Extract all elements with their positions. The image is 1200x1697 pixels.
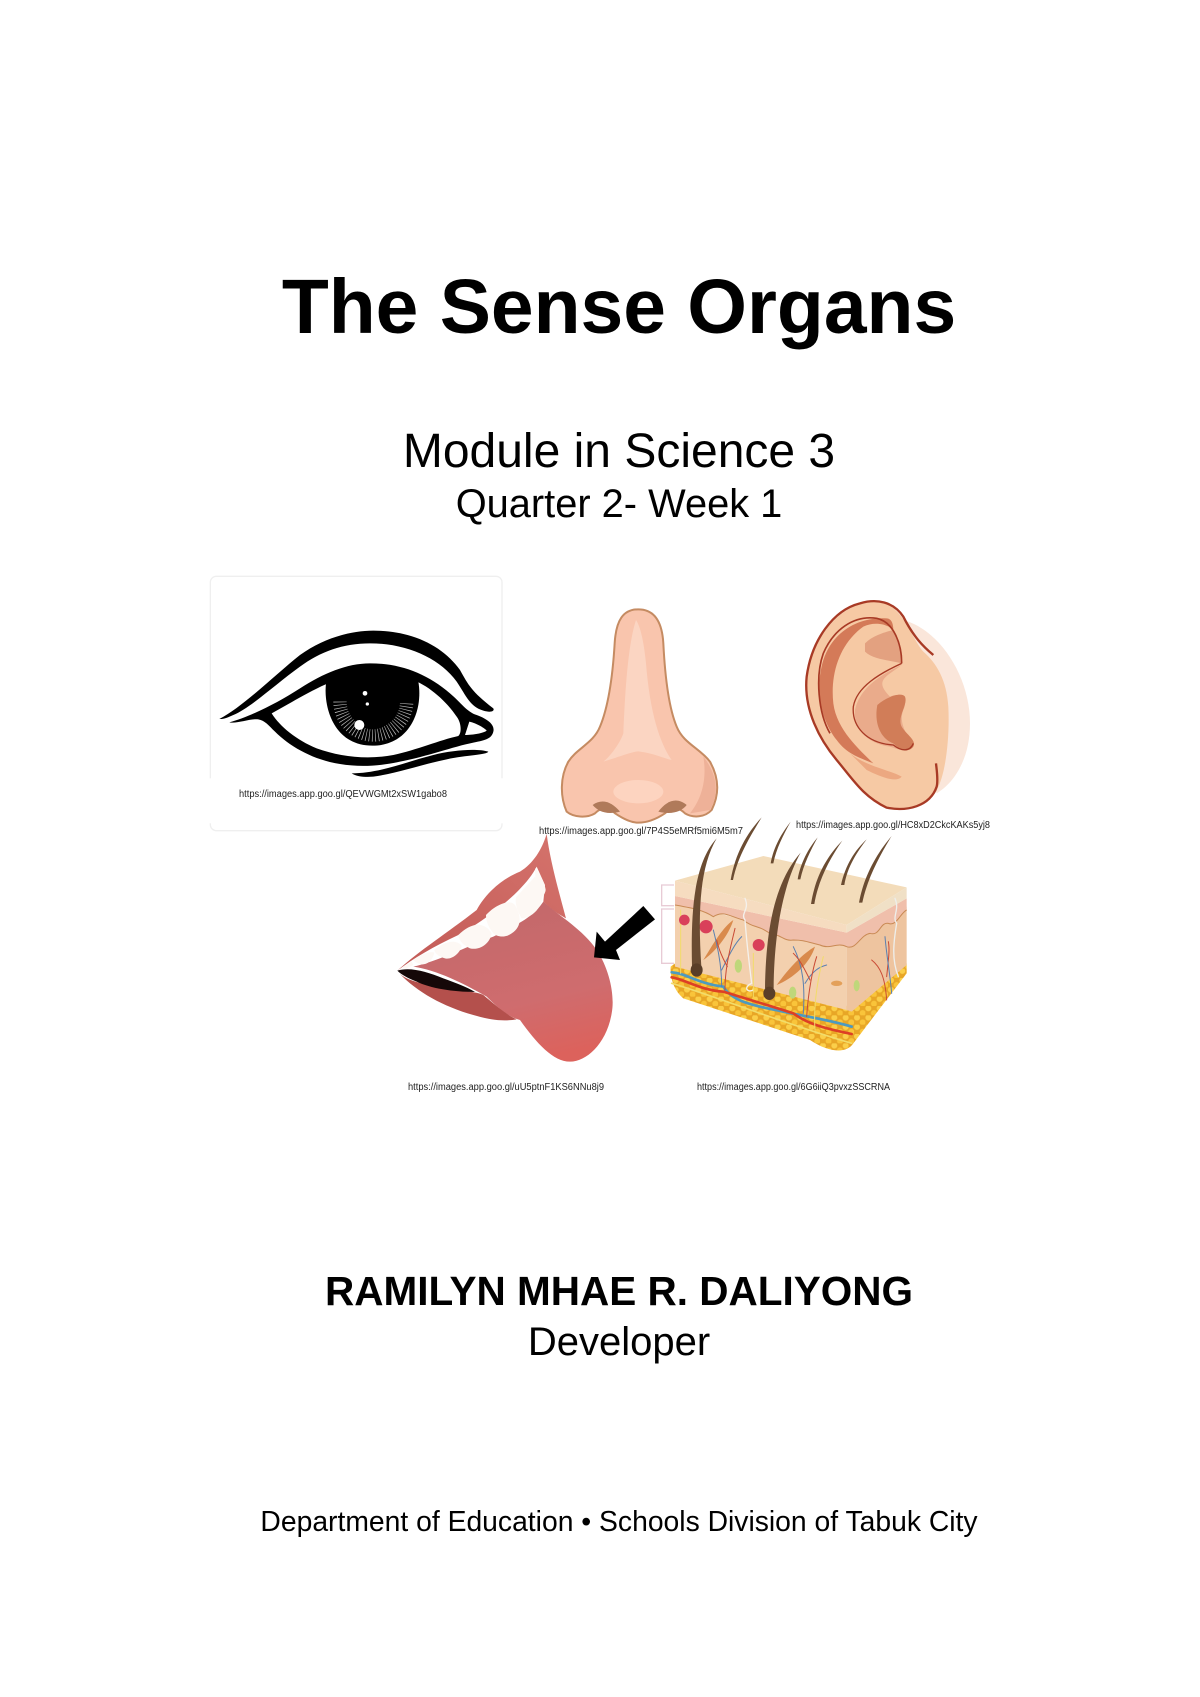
tongue image source link: https://images.app.goo.gl/uU5ptnF1KS6NNu8j9 [408, 1082, 604, 1093]
icon: skin cross-section [662, 817, 907, 1050]
fat layer [671, 963, 907, 1050]
arrow pointing to tongue [594, 906, 655, 960]
developer name: RAMILYN MHAE R. DALIYONG [325, 1268, 913, 1314]
subtitle: quarter and week: Quarter 2- Week 1 [456, 482, 782, 526]
teeth [402, 868, 546, 968]
pink layer [675, 896, 907, 947]
icon: tongue and mouth [397, 834, 613, 1062]
glands [679, 915, 690, 925]
muscles [703, 920, 733, 960]
eye outline [229, 663, 494, 766]
top surface [675, 856, 907, 925]
upper eyelid crease [219, 631, 494, 719]
iris [326, 672, 419, 746]
wavy boundary [675, 905, 907, 947]
footer: department: Department of Education • Schools Division of Tabuk City [260, 1505, 978, 1537]
layer brackets [662, 885, 674, 963]
title: The Sense Organs [282, 264, 956, 350]
lower lid line [352, 750, 488, 777]
sclera [272, 674, 461, 757]
icon: ear [806, 601, 970, 809]
skin image source link: https://images.app.goo.gl/6G6iiQ3pvxzSSCRNA [697, 1082, 890, 1093]
hairs [692, 817, 892, 988]
nose image source link: https://images.app.goo.gl/7P4S5eMRf5mi6M5m7 [539, 826, 743, 837]
ear image source link: https://images.app.goo.gl/HC8xD2CkcKAKs5yj8 [796, 820, 990, 831]
illustrations of the five sense organs [210, 576, 990, 1092]
developer role: Developer [528, 1320, 710, 1364]
icon: eye panel [208, 576, 505, 831]
dermis [675, 903, 847, 1010]
subtitle: module: Module in Science 3 [403, 425, 835, 478]
vessels and nerves [672, 898, 898, 1043]
eye image source link: https://images.app.goo.gl/QEVWGMt2xSW1gabo8 [239, 789, 447, 800]
icon: nose [562, 609, 717, 823]
